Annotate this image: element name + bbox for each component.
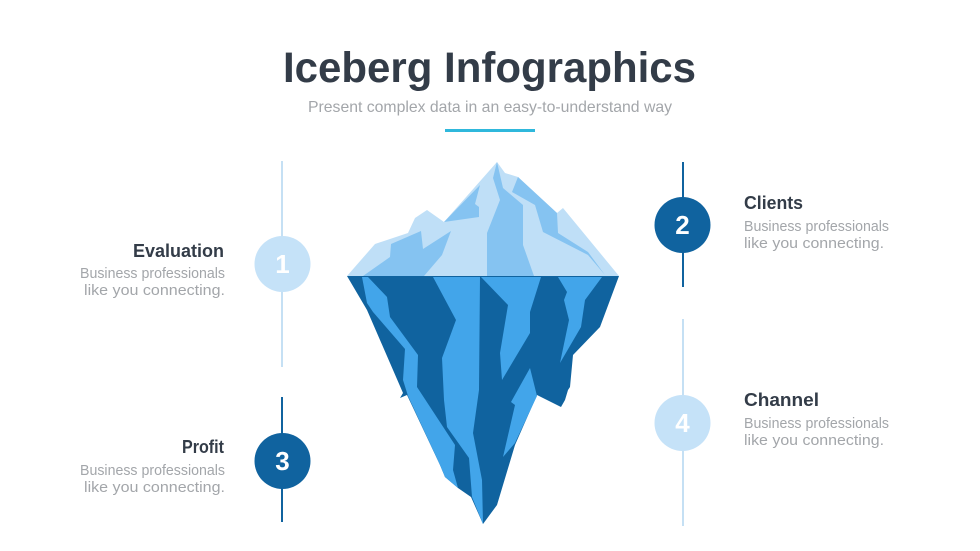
item 4: channel: 4 — [675, 408, 690, 438]
item 1: evaluation: Evaluation — [133, 240, 224, 261]
title underline — [445, 129, 535, 132]
item 2: clients: 2 — [675, 210, 690, 240]
subtitle: Present complex data in an easy-to-understand way — [308, 99, 672, 116]
item 1: evaluation: 1 — [275, 249, 290, 279]
item 4: channel: Business professionals — [744, 416, 889, 432]
item 3: profit: like you connecting. — [84, 480, 225, 496]
item 4: channel: Channel — [744, 389, 819, 410]
item 3: profit: Business professionals — [80, 463, 225, 479]
item 3: profit: 3 — [275, 446, 290, 476]
iceberg above water — [347, 162, 619, 276]
item 3: profit — [80, 397, 310, 522]
title: Iceberg Infographics — [283, 44, 696, 92]
item 3: profit: Profit — [182, 436, 224, 457]
item 4: channel: like you connecting. — [744, 433, 884, 449]
item 1: evaluation — [80, 161, 310, 367]
item 2: clients: Business professionals — [744, 219, 889, 235]
item 2: clients — [654, 162, 889, 287]
item 2: clients: Clients — [744, 192, 803, 213]
item 2: clients: like you connecting. — [744, 236, 884, 252]
item 1: evaluation: like you connecting. — [84, 283, 225, 299]
item 1: evaluation: Business professionals — [80, 266, 225, 282]
item 4: channel — [654, 319, 889, 526]
iceberg below water — [347, 276, 619, 524]
iceberg illustration — [347, 162, 619, 524]
